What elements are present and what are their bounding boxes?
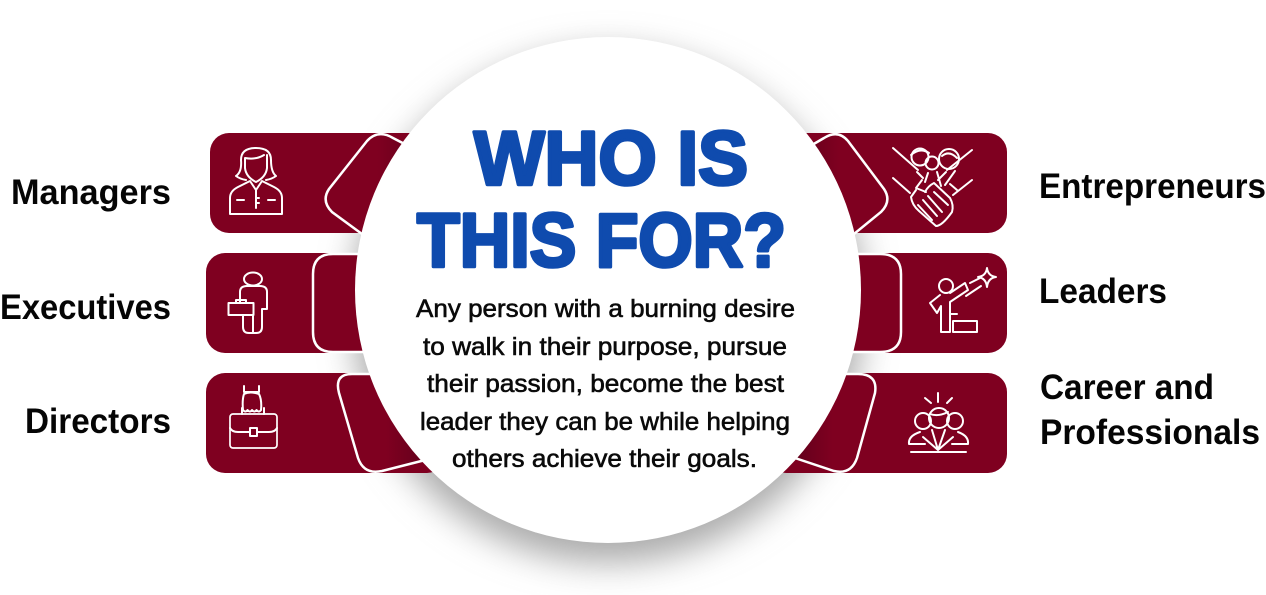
description text: to walk in their purpose, pursue (423, 333, 787, 361)
panel: executives (206, 253, 446, 353)
panel: entrepreneurs (767, 133, 1007, 234)
description text: others achieve their goals. (452, 445, 757, 473)
panel: directors (206, 373, 446, 473)
label: Executives: Executives (0, 288, 171, 327)
icon: leader reaching for star (930, 268, 996, 332)
icon: handshake and team (893, 148, 972, 226)
description text (416, 295, 795, 473)
icon: manager woman (230, 148, 282, 214)
title: THIS FOR? (417, 198, 786, 284)
panel: managers (210, 133, 450, 234)
icon: hand with briefcase (230, 386, 277, 448)
description text: their passion, become the best (427, 370, 784, 398)
label: Career and Professionals (1040, 368, 1260, 452)
label: Career and Professionals: Professionals (1040, 413, 1260, 452)
description text: leader they can be while helping (420, 408, 790, 436)
title: WHO IS (474, 116, 748, 202)
label: Leaders: Leaders (1039, 272, 1167, 311)
label: Career and Professionals: Career and (1040, 368, 1214, 407)
title (417, 116, 786, 284)
center circle (355, 37, 861, 543)
label: Managers: Managers (11, 173, 171, 212)
panel: career and professionals (767, 373, 1007, 473)
panel: leaders (767, 253, 1007, 353)
circle drop shadow (352, 51, 864, 563)
icon: professional group (909, 393, 968, 452)
icon: executive with case (228, 272, 267, 333)
description text: Any person with a burning desire (416, 295, 795, 323)
label: Directors: Directors (25, 402, 171, 441)
